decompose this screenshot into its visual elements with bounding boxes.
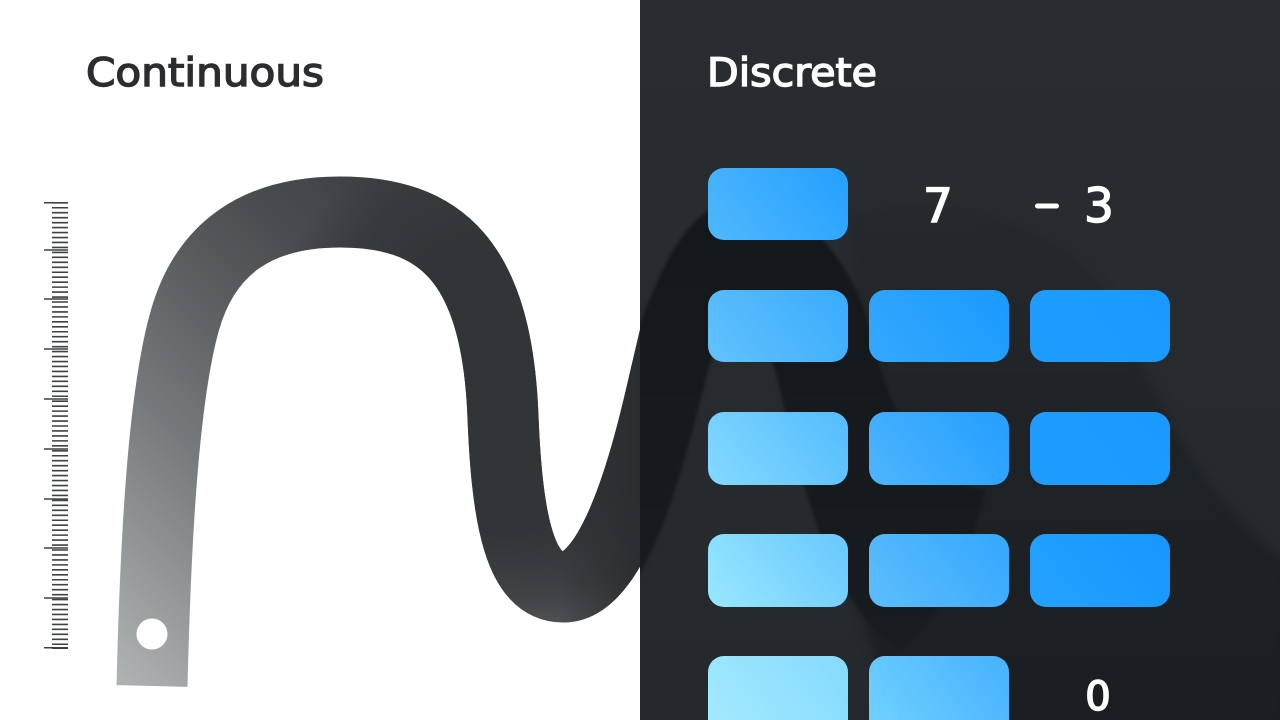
continuous curve — [152, 212, 685, 686]
ruler — [44, 202, 68, 649]
button row 4 column 3 — [1030, 534, 1170, 607]
button row 2 column 3 — [1030, 290, 1170, 362]
button row 4 column 1 — [708, 534, 848, 607]
heading: Discrete: Discrete — [707, 51, 877, 96]
panel: discrete side — [630, 0, 1280, 720]
button row 5 column 1 — [708, 656, 848, 720]
minus sign — [1035, 204, 1059, 208]
button row 3 column 1 — [708, 412, 848, 485]
number 3: 3 — [1084, 179, 1114, 234]
button row 4 column 2 — [869, 534, 1009, 607]
dark continuation of the curve — [630, 200, 1280, 720]
button row 2 column 2 — [869, 290, 1009, 362]
discrete button grid — [708, 168, 1170, 720]
number 0: 0 — [1085, 674, 1111, 720]
number 7: 7 — [923, 179, 953, 234]
curve end hole — [136, 618, 168, 650]
button row 2 column 1 — [708, 290, 848, 362]
button row 5 column 2 — [869, 656, 1009, 720]
button row 3 column 3 — [1030, 412, 1170, 485]
heading: Continuous: Continuous — [86, 51, 324, 96]
button row 3 column 2 — [869, 412, 1009, 485]
button row 1 — [708, 168, 848, 240]
